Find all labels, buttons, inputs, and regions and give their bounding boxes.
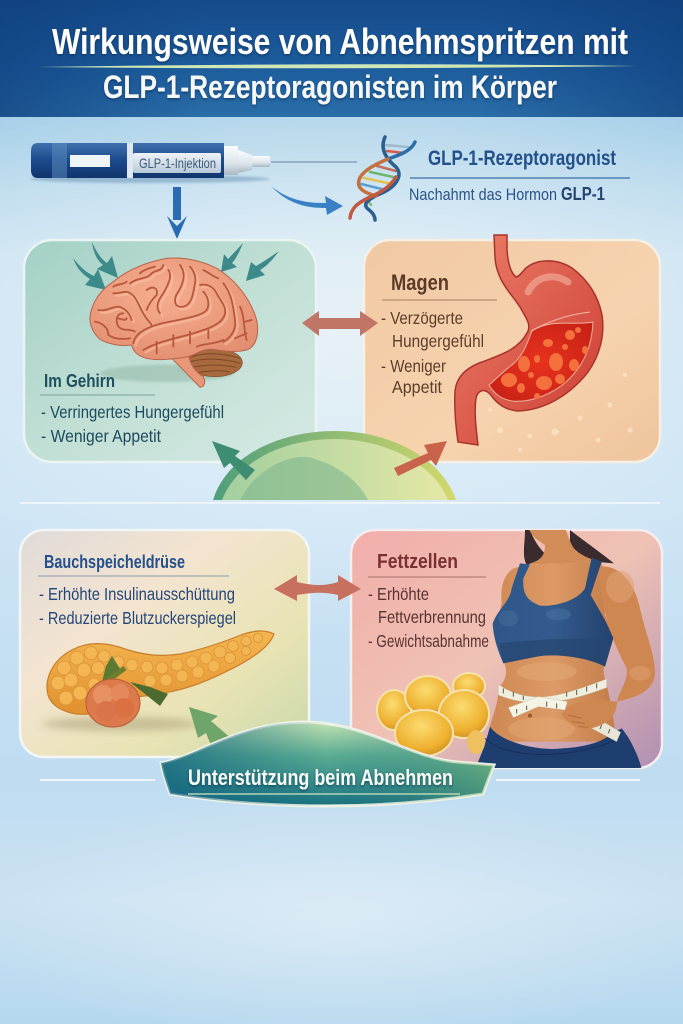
divider <box>20 502 660 504</box>
panel: pancreas <box>20 530 309 758</box>
label: stomach: Appetit <box>392 377 442 397</box>
label: pancreas: - Reduzierte Blutzuckerspiegel <box>39 608 236 628</box>
pen label: GLP-1-Injektion <box>139 155 216 171</box>
label: fat cells: Fettverbrennung <box>378 607 486 627</box>
arrows into brain <box>73 242 279 290</box>
panel: brain <box>24 240 316 462</box>
heading: GLP-1 receptor agonist: Nachahmt das Hormon <box>409 185 557 204</box>
label: fat cells: - Erhöhte <box>368 584 429 604</box>
divider lines beside banner <box>40 779 640 781</box>
label: stomach: Magen <box>391 270 449 295</box>
connector line <box>271 161 357 163</box>
title line 2: GLP-1-Rezeptoragonisten im Körper <box>103 69 557 105</box>
illustration: woman with measuring tape <box>475 530 655 768</box>
label: pancreas: - Erhöhte Insulinausschüttung <box>39 584 235 604</box>
label: stomach <box>381 270 497 397</box>
label: fat cells <box>368 551 489 651</box>
title swoosh <box>38 64 636 68</box>
speckles <box>488 373 632 452</box>
label: in the brain: Im Gehirn <box>44 371 115 391</box>
heading: GLP-1 receptor agonist: GLP-1-Rezeptoragonist <box>428 147 616 170</box>
icon: fat cells <box>377 673 489 756</box>
injection pen <box>30 143 270 183</box>
header band <box>0 0 683 117</box>
banner: support with weight loss <box>161 722 494 806</box>
label: in the brain <box>40 371 224 446</box>
label: stomach: - Verzögerte <box>381 308 463 328</box>
label: in the brain: - Verringertes Hungergefühl <box>41 402 224 422</box>
label: fat cells: Fettzellen <box>377 551 458 573</box>
label: stomach: Hungergefühl <box>392 331 484 351</box>
heading: GLP-1 receptor agonist <box>409 147 630 204</box>
heading: GLP-1 receptor agonist: GLP-1 <box>561 184 605 204</box>
label: pancreas <box>38 552 236 628</box>
panel: stomach <box>364 235 660 462</box>
icon: DNA helix <box>350 137 415 220</box>
icon: stomach <box>455 235 603 445</box>
panel: fat cells <box>351 530 662 768</box>
label: pancreas: Bauchspeicheldrüse <box>44 552 185 572</box>
arrow: green up <box>212 441 255 480</box>
label: stomach: - Weniger <box>381 356 446 376</box>
label: in the brain: - Weniger Appetit <box>41 426 161 446</box>
icon: brain <box>90 258 258 387</box>
arrow: brain to stomach <box>302 311 378 336</box>
arrow: red up <box>394 441 447 476</box>
arrow: pen to brain <box>167 187 187 239</box>
arrow: pancreas to fat cells <box>274 575 361 601</box>
label: fat cells: - Gewichtsabnahme <box>368 631 489 651</box>
arrow: pen to DNA <box>271 186 343 215</box>
arch element <box>212 431 456 500</box>
icon: pancreas <box>42 631 274 731</box>
banner: support with weight loss: Unterstützung beim Abnehmen <box>188 765 453 790</box>
arrow: green to pancreas <box>189 707 244 758</box>
